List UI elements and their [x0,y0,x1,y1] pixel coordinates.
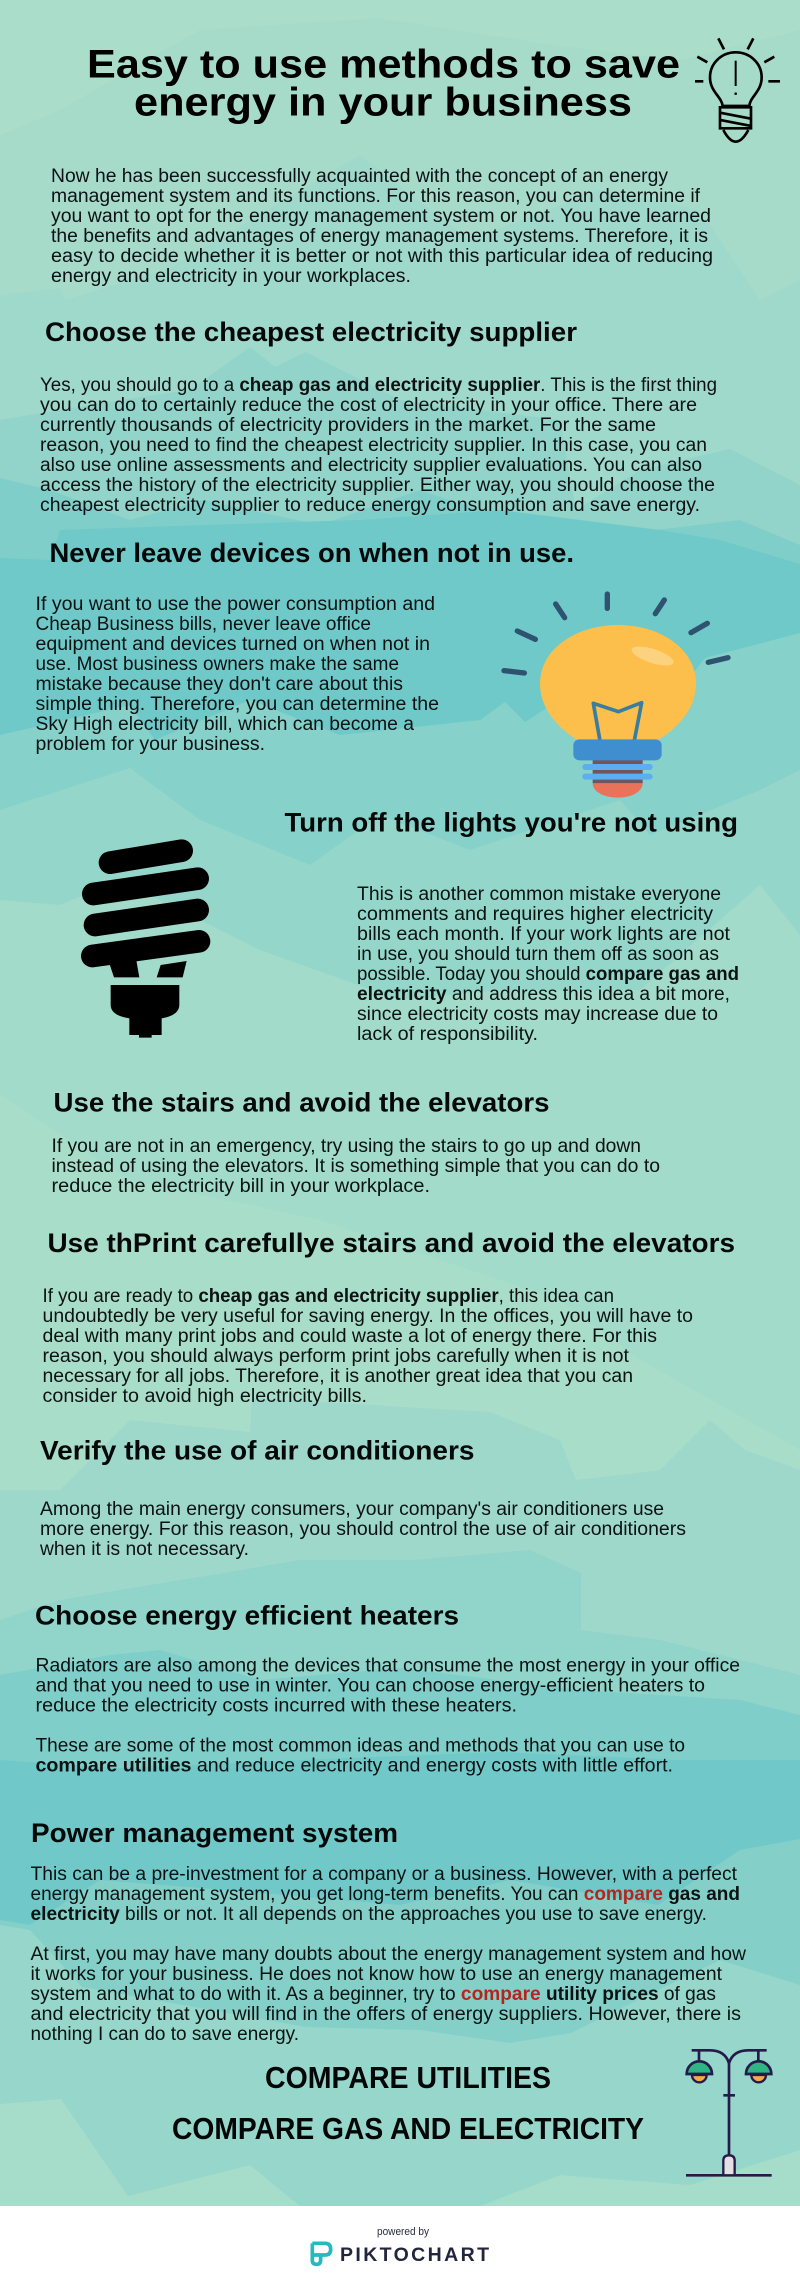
text: turn off the lights: electricity and address this idea a bit more, [357,984,730,1005]
heading: turn off the lights: Turn off the lights you're not using [284,808,738,838]
text: cheapest supplier: reason, you need to find the cheapest electricity supplier. In this case, you can [40,435,707,456]
text: never leave devices on [36,594,439,755]
text: air conditioners: Among the main energy consumers, your company's air conditioners use [40,1499,664,1520]
heading: efficient heaters: Choose energy efficient heaters [35,1600,459,1630]
text: power management system: energy management system, you get long-term benefits. You can compare gas and [30,1884,740,1905]
intro text: you want to opt for the energy management system or not. You have learned [51,206,711,227]
heading: use the stairs: Use the stairs and avoid the elevators [54,1088,550,1118]
text: efficient heaters: Radiators are also among the devices that consume the most energy in your office [36,1656,740,1676]
logo mark [312,2243,331,2264]
icon: black compact fluorescent bulb [92,851,199,1038]
intro text [51,166,713,287]
section: air conditioners [39,1436,686,1560]
text: power management system: nothing I can do to save energy. [30,2024,299,2045]
text: air conditioners: when it is not necessary. [39,1539,249,1560]
footer band [0,2206,800,2287]
text: print carefully: reason, you should always perform print jobs carefully when it is not [42,1346,630,1367]
text: turn off the lights [357,884,739,1045]
title: Easy to use methods to save [87,42,680,86]
text: turn off the lights: This is another common mistake everyone [357,884,721,905]
call to action: compare utilities: COMPARE UTILITIES [265,2060,551,2095]
intro text: easy to decide whether it is better or not with this particular idea of reducing [51,246,713,267]
text: power management system: system and what to do with it. As a beginner, try to compare utility prices of gas [30,1984,716,2005]
text: efficient heaters: These are some of the most common ideas and methods that you can use to [36,1736,685,1756]
text: power management system: and electricity that you will find in the offers of energy suppliers. However, there is [30,2004,741,2025]
text: cheapest supplier: currently thousands of electricity providers in the market. For the same [40,415,656,436]
text: power management system: electricity bills or not. It all depends on the approaches you use to save energy. [30,1904,707,1925]
section: use the stairs [52,1088,660,1197]
text: cheapest supplier: cheapest electricity supplier to reduce energy consumption and save energy. [40,495,700,516]
text: power management system [30,1864,746,2045]
icon: yellow light bulb [504,594,728,798]
text: efficient heaters: and that you need to use in winter. You can choose energy-efficient heaters to [36,1676,705,1696]
text: turn off the lights: in use, you should turn them off as soon as [357,944,719,965]
title: energy in your business [134,80,632,124]
title [87,42,680,124]
text: efficient heaters: compare utilities and reduce electricity and energy costs with little effort. [36,1756,673,1776]
text: print carefully: consider to avoid high electricity bills. [42,1386,367,1407]
footer: powered by piktochart: PIKTOCHART [340,2244,489,2266]
text: never leave devices on: problem for your business. [36,734,265,755]
text: never leave devices on: equipment and devices turned on when not in [36,634,430,655]
text: efficient heaters [36,1656,740,1776]
text: never leave devices on: Cheap Business bills, never leave office [36,614,371,635]
text: cheapest supplier: also use online assessments and electricity supplier evaluations. You can also [40,455,702,476]
text: power management system: This can be a pre-investment for a company or a business. However, with a perfect [30,1864,738,1885]
text: never leave devices on: If you want to use the power consumption and [36,594,435,615]
heading: air conditioners: Verify the use of air conditioners [40,1436,474,1466]
text: turn off the lights: since electricity costs may increase due to [357,1004,718,1025]
text: turn off the lights: comments and requires higher electricity [357,904,714,925]
text: use the stairs: reduce the electricity bill in your workplace. [52,1176,430,1197]
text: never leave devices on: use. Most business owners make the same [36,654,399,675]
intro text: the benefits and advantages of energy management systems. Therefore, it is [51,226,708,247]
intro text: energy and electricity in your workplaces. [51,266,411,287]
intro text: Now he has been successfully acquainted with the concept of an energy [51,166,669,187]
text: power management system: it works for your business. He does not know how to use an energy management [30,1964,723,1985]
section: never leave devices on [36,538,728,798]
heading: power management system: Power management system [31,1818,398,1848]
heading: print carefully: Use thPrint carefullye stairs and avoid the elevators [48,1228,735,1258]
footer: powered by piktochart [312,2226,489,2266]
footer: powered by piktochart: powered by [377,2226,429,2238]
icon: light bulb outline [695,38,780,142]
heading: cheapest supplier: Choose the cheapest electricity supplier [45,317,578,347]
text: never leave devices on: mistake because they don't care about this [36,674,403,695]
section: efficient heaters [35,1600,740,1776]
icon: street lamp [686,2050,772,2175]
call to action: compare gas and electricity: COMPARE GAS AND ELECTRICITY [172,2111,644,2146]
section: power management system [30,1818,746,2045]
text: print carefully [42,1286,693,1407]
text: cheapest supplier: access the history of the electricity supplier. Either way, you should choose the [40,475,715,496]
section: cheapest supplier [40,317,717,516]
heading: never leave devices on: Never leave devices on when not in use. [50,538,574,568]
text: print carefully: necessary for all jobs. Therefore, it is another great idea that you can [42,1366,633,1387]
text: never leave devices on: simple thing. Therefore, you can determine the [36,694,439,715]
section: turn off the lights [92,808,739,1045]
text: turn off the lights: lack of responsibility. [357,1024,538,1045]
text: air conditioners [39,1499,686,1560]
text: air conditioners: more energy. For this reason, you should control the use of air conditioners [40,1519,686,1540]
text: use the stairs: If you are not in an emergency, try using the stairs to go up and down [52,1136,641,1157]
text: use the stairs: instead of using the elevators. It is something simple that you can do to [52,1156,660,1177]
text: use the stairs [52,1136,660,1197]
text: print carefully: deal with many print jobs and could waste a lot of energy there. For this [42,1326,657,1347]
text: cheapest supplier [40,375,717,516]
text: cheapest supplier: Yes, you should go to a cheap gas and electricity supplier. This is the first thing [40,375,717,396]
text: print carefully: undoubtedly be very useful for saving energy. In the offices, you will have to [42,1306,693,1327]
text: never leave devices on: Sky High electricity bill, which can become a [36,714,414,735]
text: print carefully: If you are ready to cheap gas and electricity supplier, this idea can [42,1286,614,1307]
text: cheapest supplier: you can do to certainly reduce the cost of electricity in your office. There are [40,395,697,416]
text: power management system: At first, you may have many doubts about the energy management system and how [30,1944,746,1965]
intro text: management system and its functions. For this reason, you can determine if [51,186,701,207]
text: efficient heaters: reduce the electricity costs incurred with these heaters. [36,1696,517,1716]
text: turn off the lights: possible. Today you should compare gas and [357,964,739,985]
text: turn off the lights: bills each month. If your work lights are not [357,924,731,945]
section: print carefully [42,1228,735,1407]
